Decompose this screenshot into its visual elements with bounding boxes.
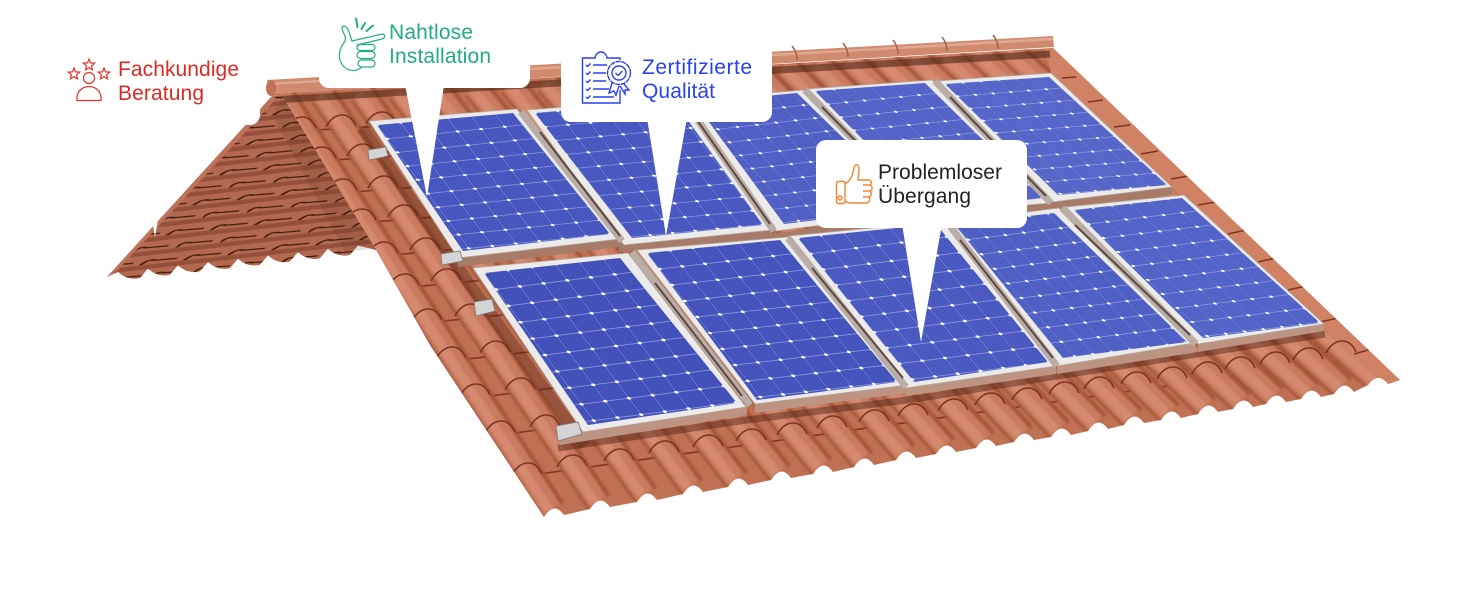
icon: thumbs up (836, 165, 872, 204)
mounting brackets (368, 147, 582, 441)
label: Fachkundige (118, 58, 239, 81)
label: Zertifizierte (642, 56, 752, 79)
icon: certified checklist (582, 52, 630, 103)
label: Problemloser (878, 161, 1002, 184)
roof: main slope with barrel tiles (260, 30, 1410, 530)
callout: Problemloser Übergang (816, 140, 1027, 342)
roof ridge cap (266, 35, 1054, 96)
icon: person with stars (68, 59, 110, 100)
label: Übergang (878, 185, 971, 208)
solar panels: bottom row (473, 195, 1324, 445)
callout: Zertifizierte Qualität (561, 34, 772, 236)
label: Beratung (118, 82, 204, 105)
roof: left gable with flat shingles (107, 95, 385, 279)
label: Installation (389, 45, 491, 68)
label: Qualität (642, 80, 715, 103)
callout: Fachkundige Beratung (49, 37, 260, 237)
right edge strip (1044, 48, 1400, 384)
callout: Nahtlose Installation (319, 0, 530, 197)
solar panels: top row (369, 73, 1172, 267)
icon: pointing hand (339, 18, 385, 71)
label: Nahtlose (389, 21, 473, 44)
